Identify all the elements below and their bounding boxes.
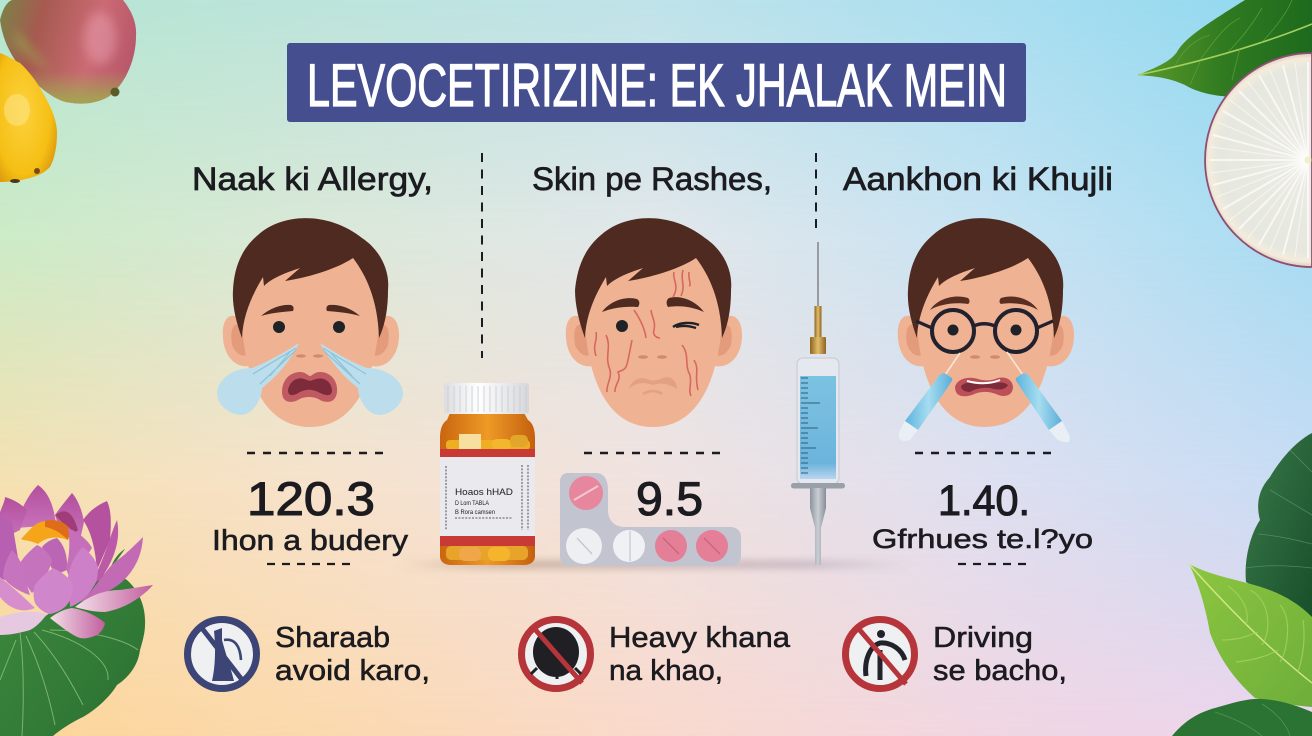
warning: no driving [846, 620, 1067, 688]
warning: no driving: se bacho, [933, 655, 1067, 687]
panel: itchy eyes [843, 161, 1113, 564]
medicine bottle [440, 383, 535, 565]
warning: avoid alcohol [188, 620, 430, 688]
decoration: lotus and lily pad bottom left [0, 485, 153, 736]
decoration: mangoes top left [0, 0, 136, 183]
caption: itchy eyes: Gfrhues te.l?yo [872, 524, 1093, 554]
icon: itchy eyes face with nasal sprays [898, 218, 1074, 442]
caption: nasal allergy: Ihon a budery [212, 525, 409, 557]
value: 9.5: 9.5 [636, 472, 703, 525]
blister pack [560, 473, 741, 566]
medicine bottle: B Rora camsen [455, 510, 495, 516]
text: no driving: Driving [933, 622, 1033, 654]
warning: no heavy food [522, 620, 791, 688]
column divider right [815, 153, 817, 228]
warning: no heavy food: na khao, [609, 655, 723, 687]
title text: LEVOCETIRIZINE: EK JHALAK MEIN [307, 52, 1007, 119]
decoration: leaf top right [1138, 0, 1312, 97]
text: avoid alcohol: Sharaab [275, 622, 390, 654]
icon: sneezing face [217, 218, 403, 427]
medicine bottle: D Lom TABLA [455, 500, 490, 507]
decoration: fruit slice top right [1205, 53, 1312, 267]
column divider left [481, 153, 483, 358]
icon: rash face [566, 218, 742, 427]
heading: skin rashes: Skin pe Rashes, [532, 161, 772, 197]
floor shadow [400, 561, 910, 568]
heading: itchy eyes: Aankhon ki Khujli [843, 161, 1113, 197]
icon: no driving [846, 620, 914, 688]
panel: nasal allergy [192, 161, 433, 564]
heading: nasal allergy: Naak ki Allergy, [192, 161, 433, 197]
icon: no heavy food [522, 620, 590, 688]
icon: no alcohol [188, 620, 256, 688]
title banner [287, 43, 1026, 122]
warning: avoid alcohol: avoid karo, [275, 655, 430, 687]
value: 1.40.: 1.40. [938, 477, 1030, 525]
syringe [791, 242, 845, 565]
value: 120.3: 120.3 [247, 472, 375, 525]
decoration: leaves bottom right [1172, 433, 1312, 736]
panel: skin rashes [532, 161, 772, 525]
bottle label text: Hoaos hHAD [455, 487, 513, 498]
text: no heavy food: Heavy khana [609, 622, 791, 654]
